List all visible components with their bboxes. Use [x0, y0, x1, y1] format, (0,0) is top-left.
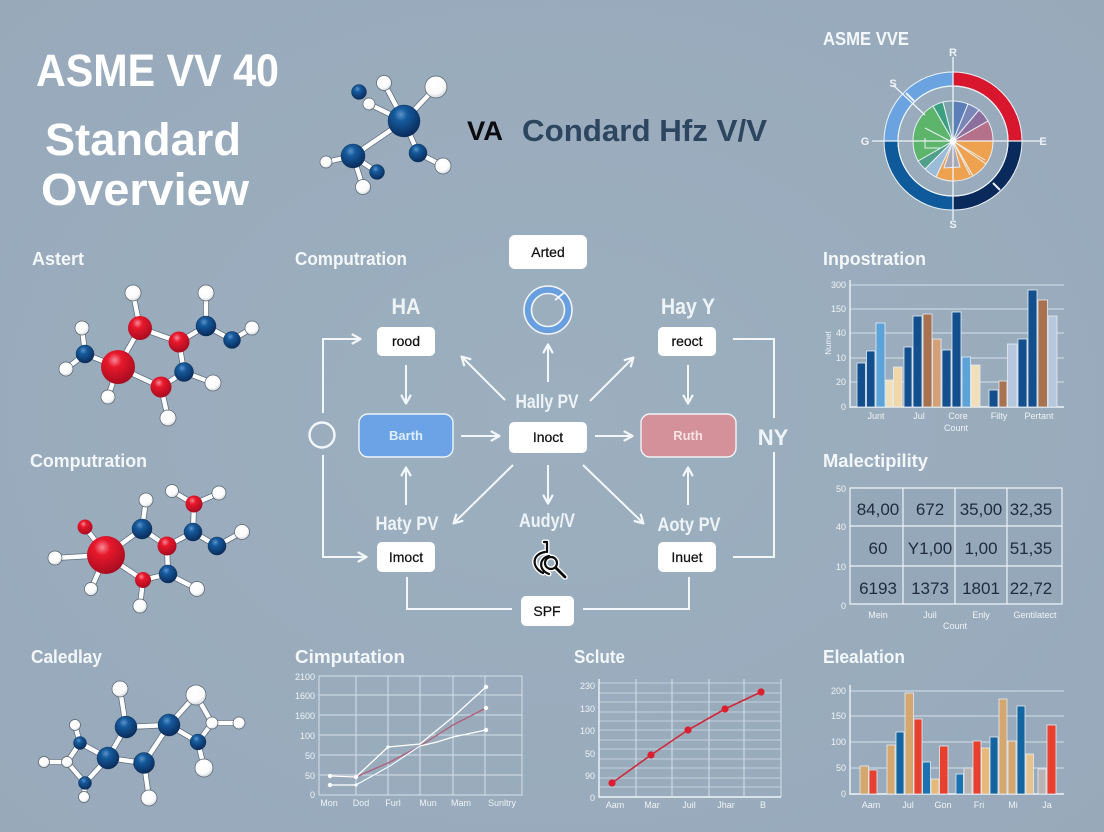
radial chart: S	[889, 78, 897, 90]
box: SPF: SPF	[533, 603, 561, 619]
box: Ruth: Ruth	[673, 428, 703, 443]
table chart: Malectipility: 0	[841, 601, 846, 611]
title: Standard	[45, 114, 241, 165]
table chart: Malectipility: Enly	[972, 610, 990, 620]
title	[36, 45, 279, 215]
table chart: Malectipility: 40	[836, 522, 846, 532]
box: Imoct	[377, 542, 435, 572]
icon: red molecule one	[59, 285, 259, 426]
radial chart: S	[949, 219, 957, 231]
heading: Astert: Astert	[32, 248, 84, 269]
box: rood	[377, 327, 435, 356]
table chart: Malectipility: 60	[869, 539, 887, 558]
box: Inoct centre: Inoct	[533, 429, 563, 445]
label: HA: HA	[392, 294, 421, 319]
heading: Sclute: Sclute	[574, 646, 625, 667]
radial chart: R	[949, 47, 957, 59]
bar chart: Inpostration: 10	[836, 353, 846, 363]
bar chart: Inpostration: 0	[841, 402, 846, 412]
icon: red molecule two	[48, 484, 250, 613]
table chart: Malectipility: 32,35	[1010, 500, 1052, 519]
heading: Cimputation: Cimputation	[295, 646, 405, 667]
line chart: Sclute: 0	[590, 793, 595, 803]
table chart: Malectipility: Mein	[868, 610, 888, 620]
icon: open circle	[310, 422, 334, 448]
heading: Computration left: Computration	[30, 450, 147, 471]
bar chart: Elealation: Mi	[1008, 800, 1018, 810]
icon: navy molecule	[38, 681, 245, 806]
line chart: Cimputation: Mam	[451, 798, 471, 808]
box: Inuet: Inuet	[671, 549, 703, 565]
line chart: Cimputation: 1600	[295, 711, 315, 721]
line chart: Cimputation: 50	[305, 751, 315, 761]
heading: Computration centre: Computration	[295, 248, 407, 269]
line chart: Sclute: 100	[580, 726, 595, 736]
line chart: Cimputation: 1600	[295, 691, 315, 701]
line chart: Sclute: 90	[585, 771, 595, 781]
line chart: Sclute: 230	[580, 681, 595, 691]
table chart: Malectipility: 1801	[962, 579, 1000, 598]
table chart: Malectipility: 672	[916, 500, 944, 519]
subtitle: VA	[467, 116, 503, 146]
table chart: Malectipility: 50	[836, 484, 846, 494]
table chart: Malectipility: 35,00	[960, 500, 1002, 519]
heading: Inpostration: Inpostration	[823, 248, 926, 269]
table chart: Malectipility: 6193	[859, 579, 897, 598]
line chart: Sclute: B	[760, 800, 766, 810]
bar chart: Inpostration: 40	[836, 328, 846, 338]
bar chart: Inpostration: 150	[831, 304, 846, 314]
bar chart: Elealation: 150	[831, 711, 846, 721]
label: Hally PV: Hally PV	[516, 392, 579, 413]
line chart: Cimputation: Mon	[320, 798, 338, 808]
table chart: Malectipility: Count	[943, 621, 968, 631]
box: rood: rood	[392, 333, 420, 349]
heading: ASME VVE: ASME VVE	[823, 28, 909, 49]
connector lines and arrows	[323, 339, 774, 609]
radial chart: E	[1039, 136, 1047, 148]
icon: magnifier glyph	[535, 542, 565, 577]
bar chart: Elealation	[831, 685, 1064, 810]
bar chart: Inpostration: Count	[944, 423, 968, 433]
box: Arted: Arted	[531, 244, 565, 260]
bar chart: Elealation: 0	[841, 789, 846, 799]
table chart: Malectipility: Y1,00	[908, 539, 952, 558]
box: Ruth	[641, 414, 736, 457]
radial chart	[861, 47, 1047, 231]
table chart: Malectipility: 1,00	[964, 539, 998, 558]
line chart: Sclute: Aam	[606, 800, 624, 810]
table chart: Malectipility: 51,35	[1010, 539, 1052, 558]
bar chart: Inpostration: Pertant	[1024, 411, 1054, 421]
box: reoct	[658, 327, 716, 356]
box: Arted	[509, 235, 587, 269]
table chart: Malectipility: 84,00	[857, 500, 899, 519]
bar chart: Elealation: 100	[831, 737, 846, 747]
box: Imoct: Imoct	[389, 549, 423, 565]
bar chart: Inpostration: Junt	[867, 411, 885, 421]
bar chart: Elealation: Ja	[1042, 800, 1052, 810]
box: Inoct centre	[509, 422, 587, 453]
line chart: Cimputation: Dod	[353, 798, 369, 808]
label: Aoty PV: Aoty PV	[658, 515, 721, 536]
line chart: Cimputation: Sunltry	[488, 798, 517, 808]
heading: Caledlay: Caledlay	[31, 646, 103, 667]
title: Overview	[41, 164, 250, 215]
flow diagram	[310, 235, 789, 626]
table chart: Malectipility: Gentilatect	[1013, 610, 1057, 620]
label: Hay Y: Hay Y	[661, 294, 715, 319]
title: ASME VV 40	[36, 45, 279, 96]
subtitle: Condard Hfz V/V	[522, 113, 767, 148]
bar chart: Elealation: Fri	[974, 800, 984, 810]
bar chart: Elealation: 50	[836, 763, 846, 773]
line chart: Cimputation: Furl	[385, 798, 401, 808]
icon: top molecule	[320, 76, 451, 194]
box: Inuet	[658, 542, 716, 572]
bar chart: Inpostration: Core	[948, 411, 968, 421]
table chart: Malectipility: 10	[836, 562, 846, 572]
box: reoct: reoct	[671, 333, 703, 349]
line chart: Sclute: Jhar	[717, 800, 735, 810]
heading: Malectipility: Malectipility	[823, 450, 929, 471]
line chart: Sclute: 130	[580, 704, 595, 714]
label: Audy/V: Audy/V	[519, 511, 575, 532]
bar chart: Elealation: Jul	[902, 800, 914, 810]
line chart: Sclute: 50	[585, 749, 595, 759]
bar chart: Inpostration: Numet	[824, 330, 833, 355]
icon: progress ring	[524, 286, 572, 334]
table chart: Malectipility: Juil	[923, 610, 937, 620]
bar chart: Elealation: Gon	[934, 800, 952, 810]
line chart: Cimputation: 0	[310, 790, 315, 800]
box: Barth	[359, 414, 453, 457]
line chart: Sclute: Mar	[644, 800, 660, 810]
label: Haty PV: Haty PV	[376, 514, 439, 535]
bar chart: Inpostration: Jul	[913, 411, 925, 421]
line chart: Sclute: Juil	[682, 800, 696, 810]
bar chart: Inpostration: 300	[831, 280, 846, 290]
line chart: Cimputation: 50	[305, 771, 315, 781]
bar chart: Inpostration: Filty	[991, 411, 1008, 421]
line chart: Cimputation: 100	[300, 731, 315, 741]
line chart: Cimputation: Mun	[419, 798, 437, 808]
bar chart: Elealation: 200	[831, 686, 846, 696]
bar chart: Elealation: Aam	[862, 800, 880, 810]
box: Barth: Barth	[389, 428, 423, 443]
table chart: Malectipility: 1373	[911, 579, 949, 598]
radial chart: G	[861, 136, 869, 148]
line chart: Cimputation: 2100	[295, 672, 315, 682]
label: NY: NY	[758, 425, 789, 450]
bar chart: Inpostration: 20	[836, 377, 846, 387]
heading: Elealation: Elealation	[823, 646, 905, 667]
bar chart: Inpostration	[824, 280, 1064, 433]
table chart: Malectipility: 22,72	[1010, 579, 1052, 598]
line chart: Sclute	[580, 679, 781, 810]
box: SPF	[521, 596, 574, 626]
table chart: Malectipility	[836, 484, 1062, 631]
line chart: Cimputation	[295, 672, 522, 808]
